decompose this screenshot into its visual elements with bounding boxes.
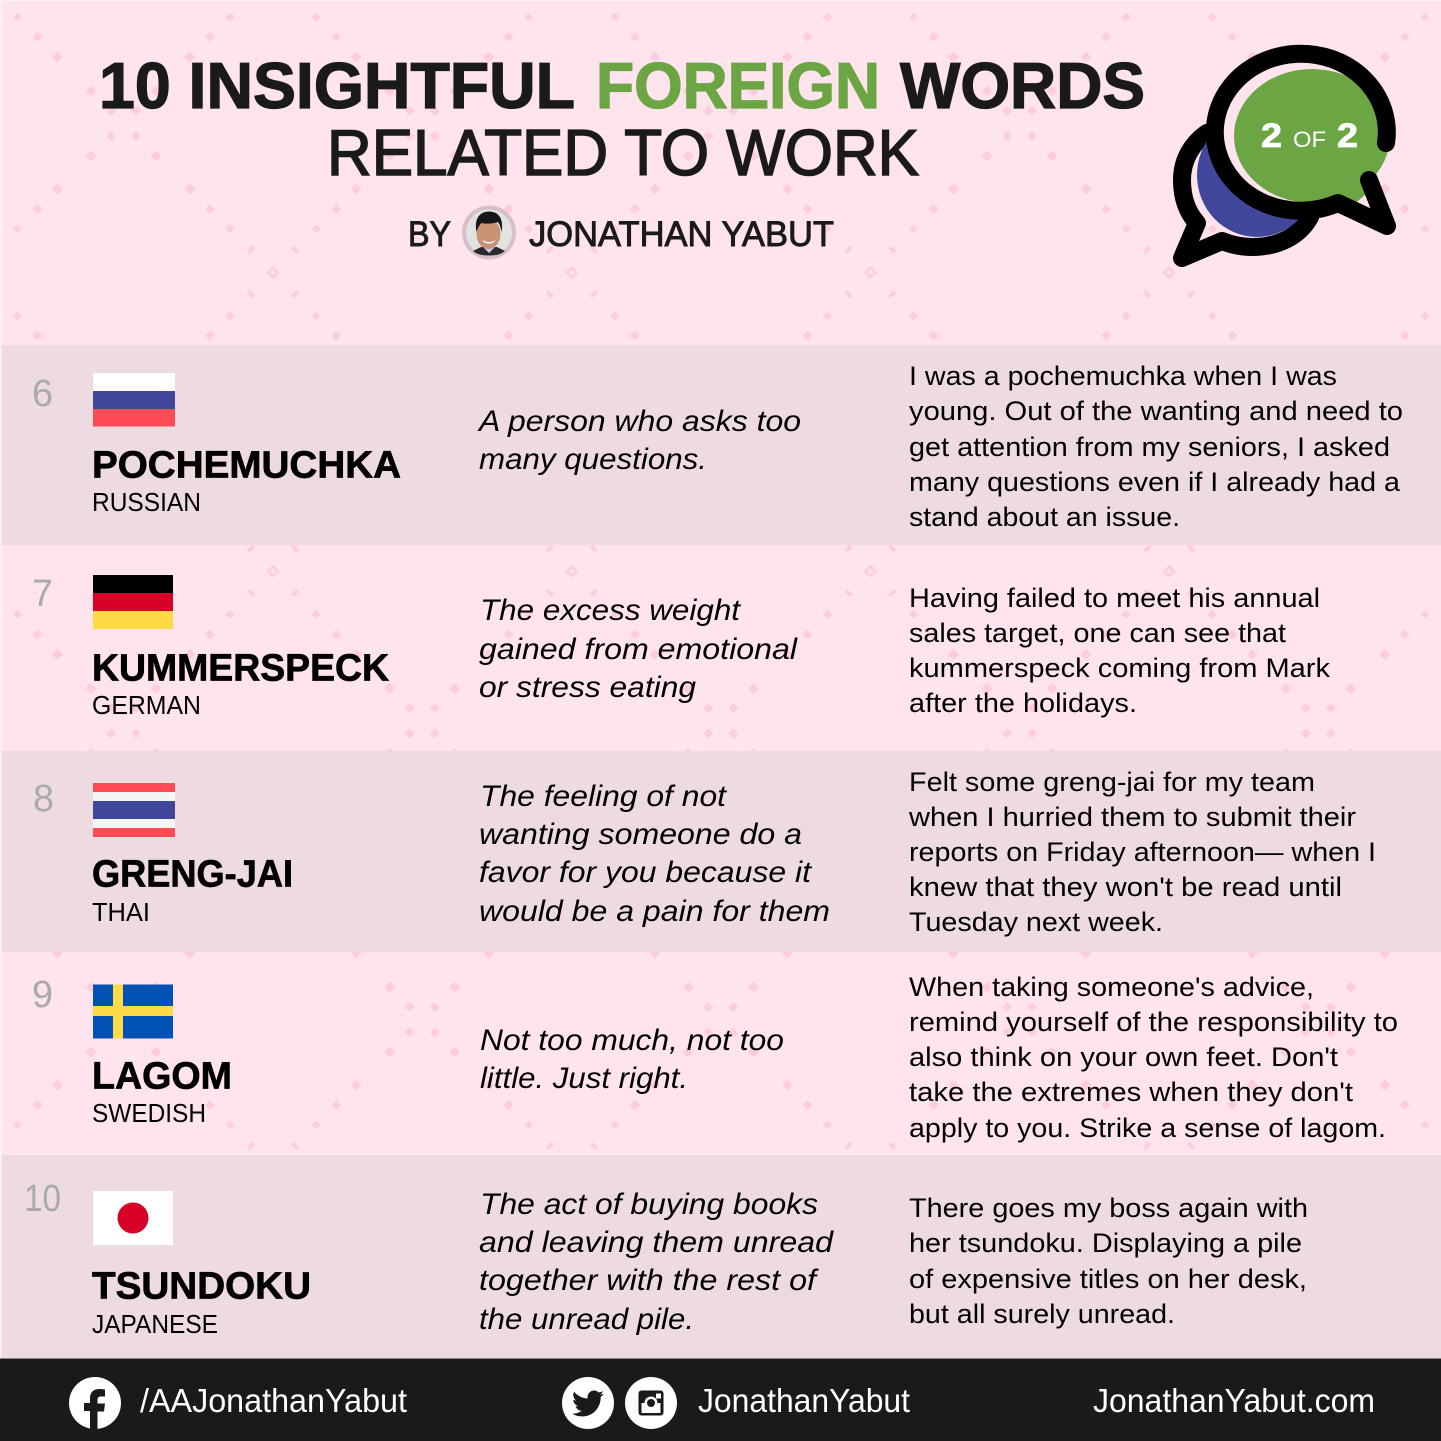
definition: favor for you because it	[479, 856, 813, 889]
example: when I hurried them to submit their	[908, 802, 1356, 832]
footer: /AAJonathanYabut	[140, 1382, 407, 1419]
footer: JonathanYabut	[698, 1382, 910, 1419]
panel: row 10 tsundoku: TSUNDOKU	[92, 1266, 311, 1308]
panel: row 10 tsundoku: JAPANESE	[92, 1311, 218, 1339]
definition: many questions.	[479, 443, 707, 476]
badge label: 2	[1337, 117, 1358, 155]
definition: The act of buying books	[480, 1188, 818, 1221]
example: many questions even if I already had a	[909, 467, 1401, 497]
title: 10 INSIGHTFUL	[99, 49, 575, 122]
example	[909, 972, 1398, 1143]
example: Tuesday next week.	[909, 907, 1163, 937]
icon: author portrait	[462, 206, 516, 260]
byline: BY	[408, 215, 451, 254]
definition	[479, 594, 798, 704]
panel: row 9 lagom: SWEDISH	[92, 1100, 206, 1128]
icon: Russian flag	[93, 373, 175, 426]
example: after the holidays.	[909, 688, 1137, 718]
panel: row 7 kummerspeck: KUMMERSPECK	[92, 648, 390, 690]
definition: together with the rest of	[479, 1264, 819, 1297]
example: Having failed to meet his annual	[909, 583, 1320, 613]
example: of expensive titles on her desk,	[909, 1264, 1307, 1294]
title: WORDS	[900, 49, 1145, 122]
example: remind yourself of the responsibility to	[909, 1007, 1398, 1037]
icon: instagram	[625, 1377, 677, 1429]
definition: The feeling of not	[480, 780, 728, 813]
example: her tsundoku. Displaying a pile	[909, 1228, 1302, 1258]
definition: A person who asks too	[477, 405, 801, 438]
panel: row 9 lagom: 9	[32, 974, 53, 1016]
panel: row 8 greng-jai	[2, 751, 1441, 952]
example	[909, 583, 1331, 718]
definition: wanting someone do a	[479, 818, 802, 851]
badge label	[1261, 117, 1358, 155]
definition	[477, 405, 801, 476]
panel: row 7 kummerspeck: 7	[32, 573, 53, 615]
example: sales target, one can see that	[909, 618, 1287, 648]
footer: JonathanYabut.com	[1093, 1382, 1375, 1419]
definition: Not too much, not too	[480, 1024, 784, 1057]
icon: twitter	[562, 1377, 614, 1429]
panel: row 8 greng-jai: GRENG-JAI	[92, 854, 293, 896]
example: also think on your own feet. Don't	[909, 1042, 1339, 1072]
icon: Swedish flag	[93, 984, 173, 1038]
example	[908, 767, 1376, 937]
example: take the extremes when they don't	[909, 1077, 1354, 1107]
example: but all surely unread.	[909, 1299, 1175, 1329]
icon: German flag	[93, 575, 173, 629]
definition	[480, 1024, 784, 1095]
title: RELATED TO WORK	[327, 116, 919, 189]
definition: gained from emotional	[479, 633, 798, 666]
badge label: OF	[1293, 127, 1326, 152]
example: I was a pochemuchka when I was	[909, 361, 1337, 391]
example: stand about an issue.	[909, 502, 1180, 532]
example: kummerspeck coming from Mark	[909, 653, 1331, 683]
footer	[0, 1358, 1441, 1441]
panel: row 6 pochemuchka: POCHEMUCHKA	[92, 444, 401, 486]
example: When taking someone's advice,	[909, 972, 1314, 1002]
definition: would be a pain for them	[479, 895, 830, 928]
example: There goes my boss again with	[909, 1193, 1308, 1223]
panel: row 6 pochemuchka: RUSSIAN	[92, 489, 201, 517]
example	[909, 361, 1403, 532]
icon: facebook	[69, 1377, 121, 1430]
panel: row 8 greng-jai: THAI	[92, 899, 150, 927]
panel: row 9 lagom	[32, 972, 1398, 1143]
icon: Japanese flag	[93, 1191, 173, 1245]
panel: row 6 pochemuchka	[2, 345, 1441, 545]
example: young. Out of the wanting and need to	[909, 396, 1403, 426]
example: Felt some greng-jai for my team	[909, 767, 1315, 797]
title	[99, 49, 1145, 189]
example: knew that they won't be read until	[909, 872, 1342, 902]
definition: The excess weight	[480, 594, 742, 627]
icon: Thai flag	[93, 783, 175, 837]
example: apply to you. Strike a sense of lagom.	[909, 1113, 1386, 1143]
definition	[479, 780, 830, 928]
badge label: 2	[1261, 117, 1282, 155]
panel: row 9 lagom: LAGOM	[92, 1056, 232, 1098]
example: reports on Friday afternoon— when I	[909, 837, 1376, 867]
definition: little. Just right.	[480, 1062, 688, 1095]
panel: row 10 tsundoku: 10	[24, 1178, 61, 1220]
panel: row 10 tsundoku	[2, 1155, 1441, 1358]
panel: row 7 kummerspeck	[32, 573, 1331, 720]
definition: and leaving them unread	[479, 1226, 834, 1259]
byline: JONATHAN YABUT	[529, 215, 834, 254]
definition: or stress eating	[479, 671, 696, 704]
byline	[408, 206, 834, 260]
icon: speech bubbles badge	[1182, 53, 1390, 258]
panel: row 7 kummerspeck: GERMAN	[92, 692, 201, 720]
definition: the unread pile.	[479, 1303, 694, 1336]
example: get attention from my seniors, I asked	[909, 432, 1390, 462]
definition	[479, 1188, 834, 1336]
panel: row 8 greng-jai: 8	[33, 778, 54, 820]
title: FOREIGN	[596, 49, 880, 122]
panel: row 6 pochemuchka: 6	[32, 373, 53, 415]
example	[909, 1193, 1308, 1329]
